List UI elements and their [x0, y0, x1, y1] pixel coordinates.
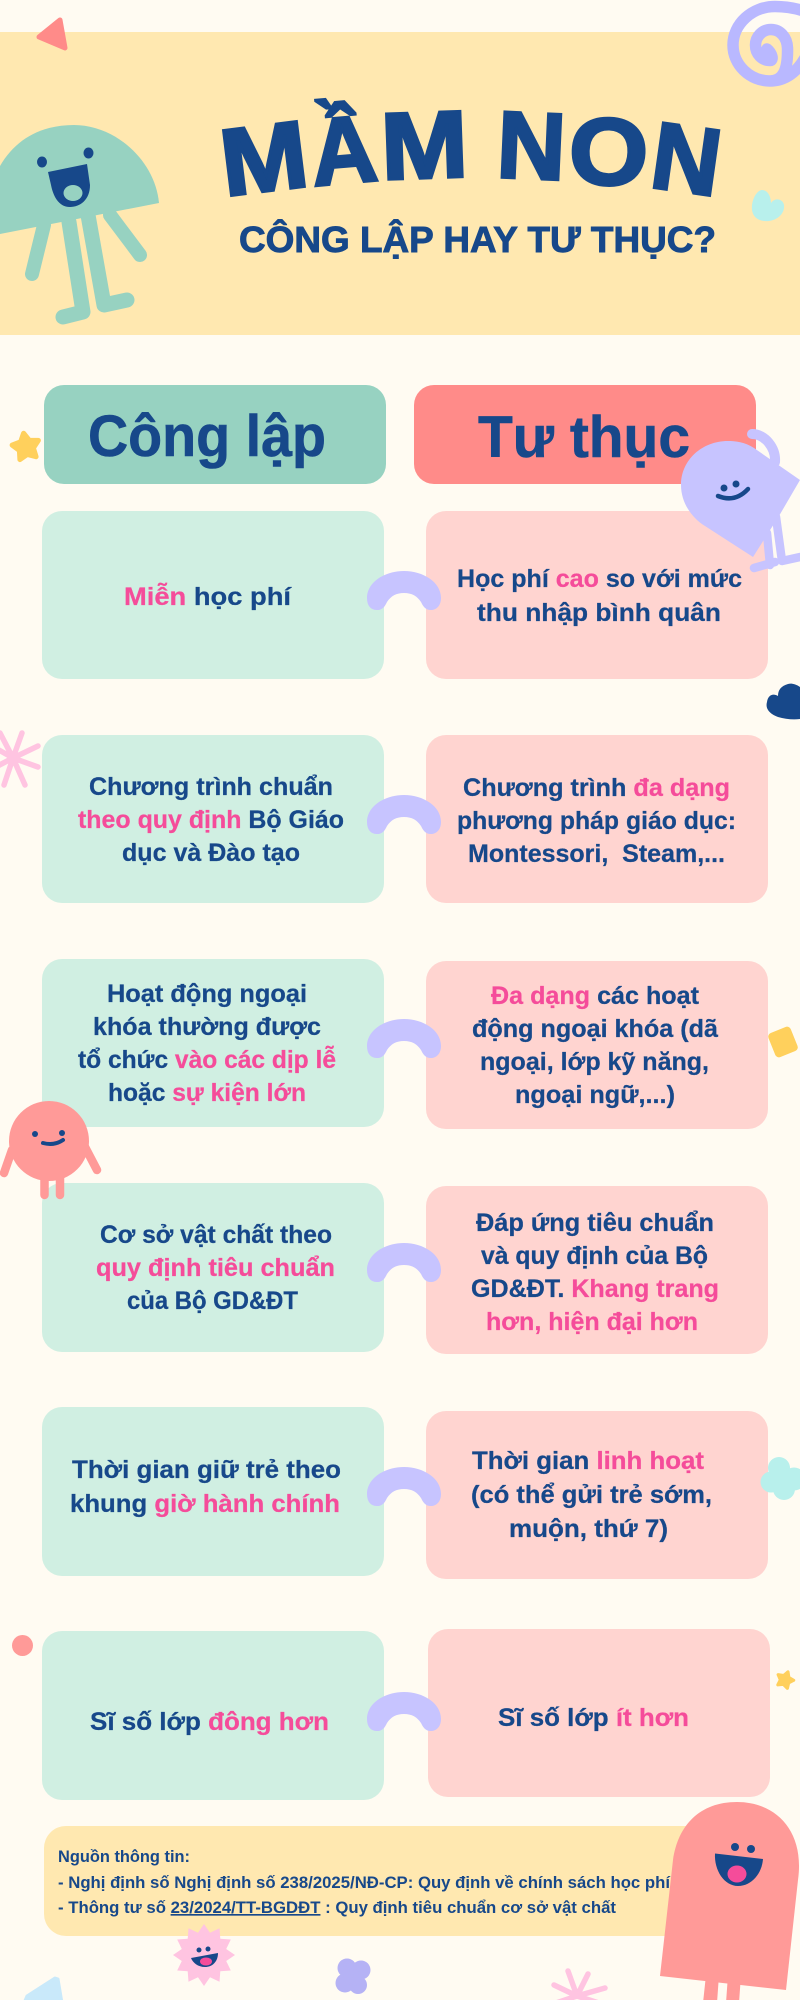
arrow: arch row 5 — [367, 1467, 441, 1506]
icon: navy heart — [767, 684, 800, 719]
panel: row 5 private: (có thể gửi trẻ sớm, — [471, 1481, 712, 1509]
panel: row 2 private — [426, 735, 768, 903]
title: MẦM NON: N — [645, 103, 728, 217]
panel: row 4 private: Đáp ứng tiêu chuẩn — [476, 1209, 714, 1237]
panel: row 4 public: của Bộ GD&ĐT — [127, 1287, 298, 1315]
icon: yellow star — [12, 433, 38, 460]
character: lilac creature — [681, 434, 800, 568]
arrow: arch row 3 — [367, 1019, 441, 1058]
panel: row 5 public: khung giờ hành chính — [70, 1490, 340, 1518]
panel: row 3 private — [426, 961, 768, 1129]
character: big coral monster — [660, 1802, 799, 2000]
header band — [0, 32, 800, 335]
panel: sources — [44, 1826, 734, 1936]
panel: row 2 public — [42, 735, 384, 903]
panel: row 2 public: theo quy định Bộ Giáo — [78, 806, 344, 834]
panel: row 4 private: và quy định của Bộ — [481, 1242, 708, 1270]
panel: row 4 public — [42, 1183, 384, 1352]
panel: row 2 private: Montessori, Steam,... — [468, 840, 725, 868]
heading: Tư thục — [414, 385, 756, 484]
icon: pink asterisk left — [0, 733, 38, 785]
panel: row 3 private: Đa dạng các hoạt — [491, 982, 700, 1010]
title: MẦM NON: N — [495, 92, 568, 201]
panel: row 5 private: Thời gian linh hoạt — [472, 1447, 705, 1475]
panel: row 1 public: Miễn học phí — [124, 581, 292, 611]
heading: Công lập: Công lập — [88, 404, 326, 469]
panel: row 4 public: quy định tiêu chuẩn — [96, 1254, 335, 1282]
arrow: arch row 1 — [367, 571, 441, 610]
icon: cyan heart — [752, 190, 784, 221]
icon: coral triangle — [39, 20, 65, 48]
title: MẦM NON: O — [567, 97, 650, 206]
panel: row 4 private: hơn, hiện đại hơn — [486, 1308, 698, 1336]
panel: row 4 private — [426, 1186, 768, 1354]
subtitle: CÔNG LẬP HAY TƯ THỤC? — [239, 218, 716, 260]
heading: Công lập — [44, 385, 386, 484]
arrow: arch row 6 — [367, 1692, 441, 1731]
panel: row 6 public: Sĩ số lớp đông hơn — [90, 1708, 329, 1736]
panel: row 1 public — [42, 511, 384, 679]
panel: row 3 public — [42, 959, 384, 1127]
icon: pink asterisk bottom — [550, 1971, 605, 2000]
panel: row 5 public: Thời gian giữ trẻ theo — [72, 1456, 341, 1484]
title: MẦM NON: M — [214, 102, 314, 217]
panel: row 3 private: động ngoại khóa (dã — [472, 1015, 718, 1043]
character: pink spiky sun — [173, 1924, 235, 1986]
title: MẦM NON: Ầ — [306, 95, 381, 206]
panel: row 5 public — [42, 1407, 384, 1576]
panel: row 6 public — [42, 1631, 384, 1800]
icon: cyan flower — [760, 1457, 800, 1500]
panel: row 5 private: muộn, thứ 7) — [509, 1515, 668, 1543]
icon: lilac flower — [336, 1958, 370, 1994]
panel: row 3 private: ngoại, lớp kỹ năng, — [480, 1048, 709, 1076]
panel: row 4 private: GD&ĐT. Khang trang — [471, 1275, 719, 1303]
panel: row 4 public: Cơ sở vật chất theo — [100, 1221, 332, 1249]
arrow: arch row 4 — [367, 1243, 441, 1282]
panel: row 3 public: khóa thường được — [93, 1013, 321, 1041]
arrow: arch row 2 — [367, 795, 441, 834]
character: coral round creature — [4, 1101, 97, 1195]
title: MẦM NON: M — [379, 92, 470, 200]
character: mint jellyfish — [0, 125, 159, 317]
panel: row 6 private — [428, 1629, 770, 1797]
panel: row 2 private: phương pháp giáo dục: — [457, 807, 736, 835]
text: source line 1: - Nghị định số Nghị định số 238/2025/NĐ-CP: Quy định về chính sách học phí — [58, 1874, 671, 1892]
panel: row 3 public: hoặc sự kiện lớn — [108, 1079, 306, 1107]
title: MẦM NON — [214, 92, 728, 217]
panel: row 3 private: ngoại ngữ,...) — [515, 1081, 675, 1109]
text: sources heading: Nguồn thông tin: — [58, 1848, 190, 1866]
icon: light blue triangle — [24, 1978, 62, 2000]
panel: row 5 private — [426, 1411, 768, 1579]
icon: yellow diamond — [767, 1025, 799, 1059]
panel: row 1 private — [426, 511, 768, 679]
panel: row 6 private: Sĩ số lớp ít hơn — [498, 1704, 689, 1732]
panel: row 2 public: Chương trình chuẩn — [89, 773, 333, 801]
icon: small yellow star — [774, 1668, 796, 1691]
heading: Tư thục: Tư thục — [478, 405, 690, 470]
panel: row 2 public: dục và Đào tạo — [122, 839, 300, 867]
icon: lilac spiral — [733, 6, 800, 81]
panel: row 2 private: Chương trình đa dạng — [463, 774, 730, 802]
panel: row 3 public: Hoạt động ngoại — [107, 980, 307, 1008]
panel: row 3 public: tổ chức vào các dịp lễ — [78, 1044, 336, 1074]
text: source line 2: - Thông tư số 23/2024/TT-BGDĐT : Quy định tiêu chuẩn cơ sở vật chất — [58, 1899, 617, 1917]
panel: row 1 private: thu nhập bình quân — [477, 599, 721, 627]
icon: coral dot — [12, 1635, 33, 1656]
panel: row 1 private: Học phí cao so với mức — [457, 565, 742, 593]
